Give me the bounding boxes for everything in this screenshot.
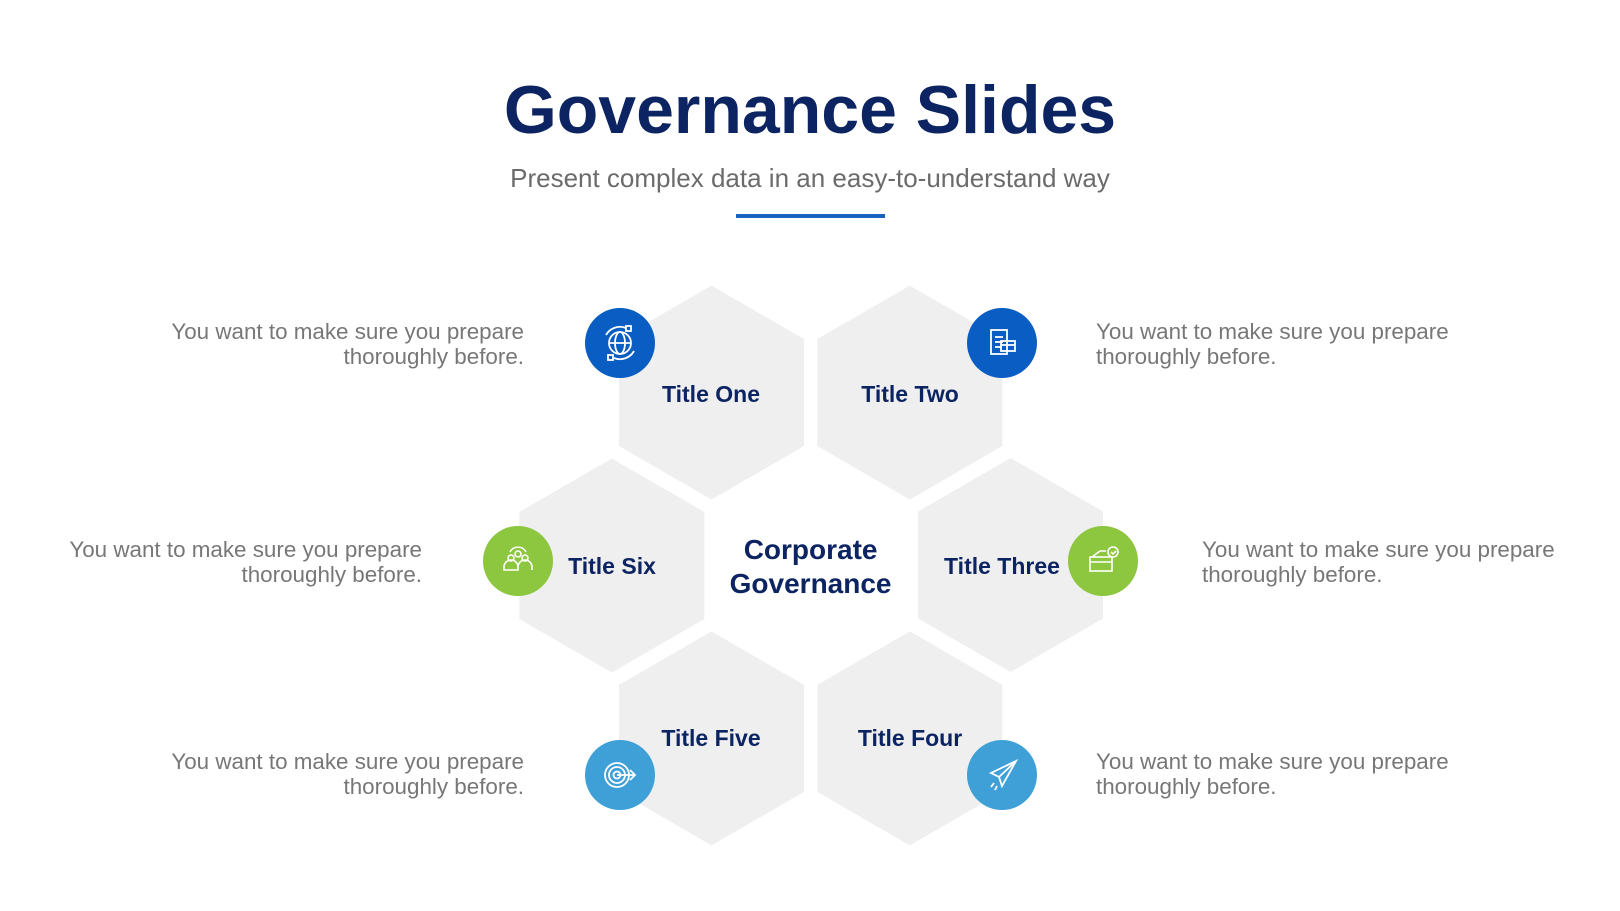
icon: document <box>967 308 1037 378</box>
hex titles: Title Two <box>861 381 959 407</box>
descriptions <box>69 319 1555 799</box>
text: five: You want to make sure you prepare <box>171 749 524 774</box>
hex titles: Title Five <box>661 725 761 751</box>
text: six: You want to make sure you prepare <box>69 537 422 562</box>
text: four: thoroughly before. <box>1096 774 1276 799</box>
hexagon grid <box>519 286 1103 845</box>
icon: paper plane <box>967 740 1037 810</box>
text: one: You want to make sure you prepare <box>171 319 524 344</box>
hex titles: Title One <box>662 381 760 407</box>
hex titles: Title Six <box>568 553 656 579</box>
text: three: thoroughly before. <box>1202 562 1382 587</box>
text: three: You want to make sure you prepare <box>1202 537 1555 562</box>
hex titles: Title Three <box>944 553 1060 579</box>
subtitle: Present complex data in an easy-to-understand way <box>510 163 1110 193</box>
text: two: You want to make sure you prepare <box>1096 319 1449 344</box>
hex titles: Title Four <box>858 725 962 751</box>
icon: target <box>585 740 655 810</box>
hex titles <box>568 381 1060 751</box>
text: four: You want to make sure you prepare <box>1096 749 1449 774</box>
text: six: thoroughly before. <box>242 562 422 587</box>
center label <box>730 534 892 599</box>
icon: people <box>483 526 553 596</box>
text: five: thoroughly before. <box>344 774 524 799</box>
text: one: thoroughly before. <box>344 344 524 369</box>
text: two: thoroughly before. <box>1096 344 1276 369</box>
icon: globe <box>585 308 655 378</box>
icon: box with check <box>1068 526 1138 596</box>
center label: Corporate <box>744 534 877 565</box>
center label: Governance <box>730 568 892 599</box>
title: Governance Slides <box>504 72 1116 148</box>
